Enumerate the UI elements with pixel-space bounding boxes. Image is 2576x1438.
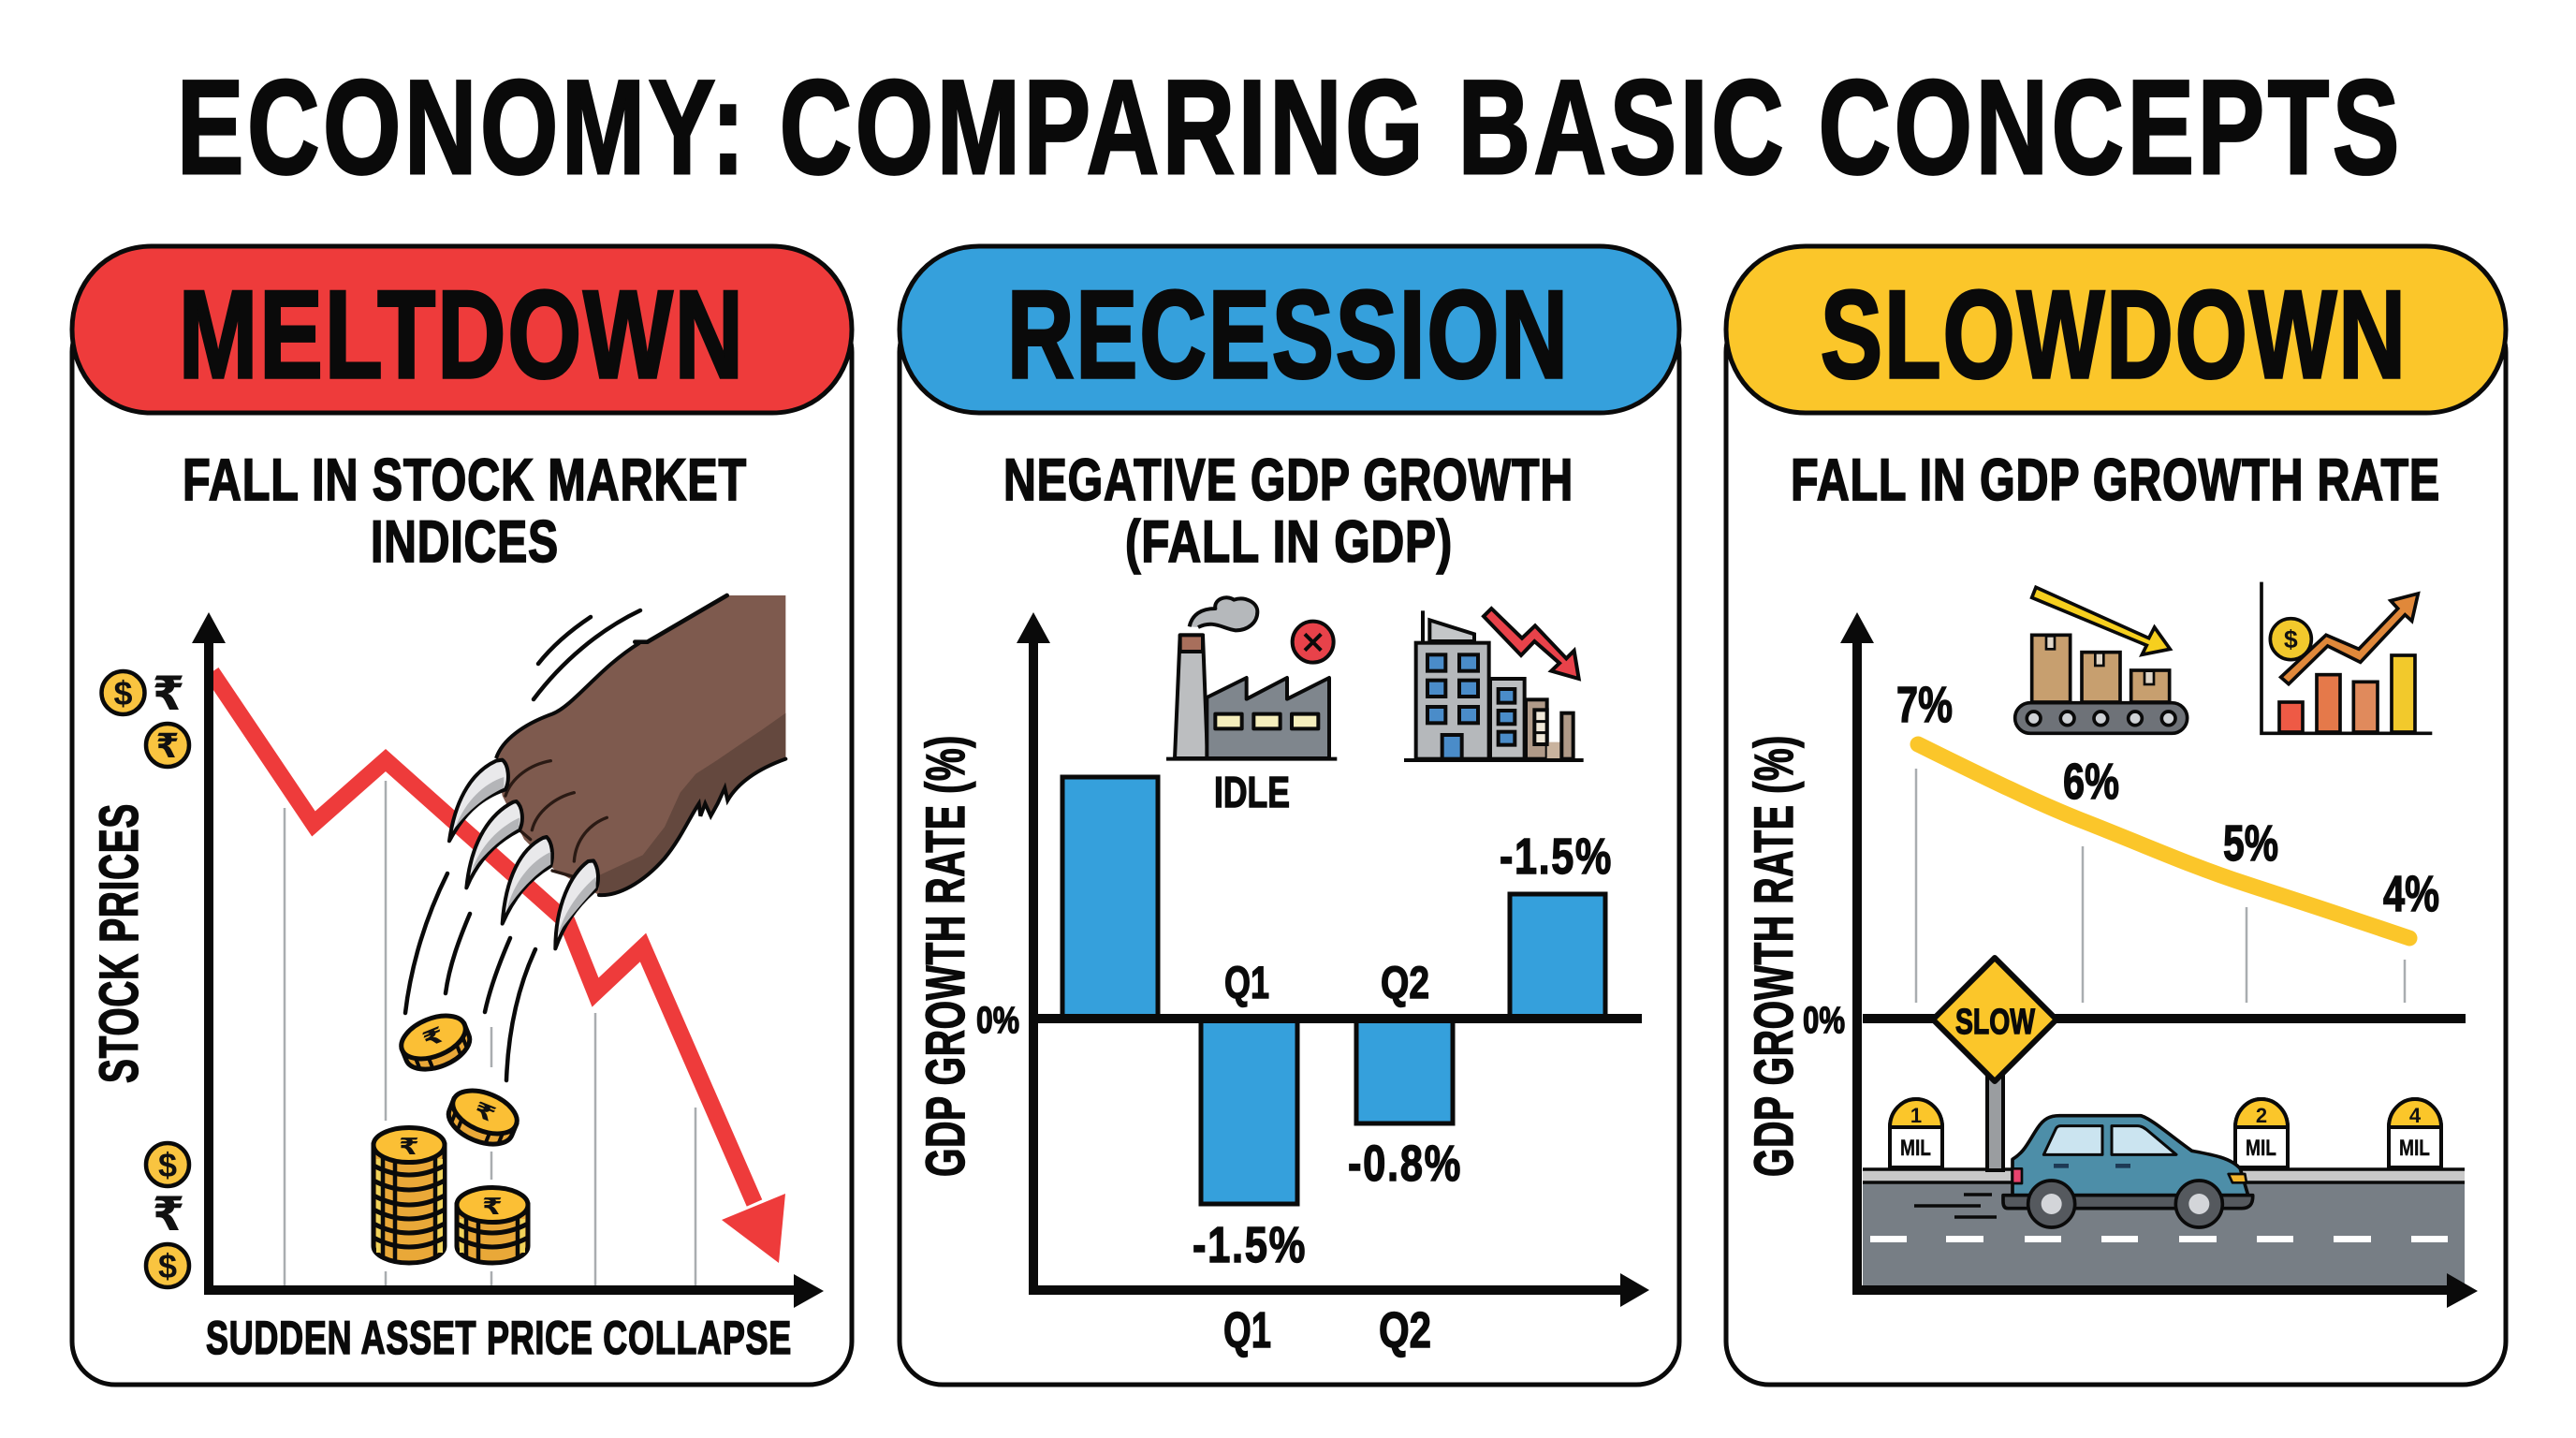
milestone 1: 1 [1910,1104,1922,1127]
sign: slow [1933,958,2056,1170]
label: idle: IDLE [1214,768,1290,816]
growth slowdown chart: 4% [2383,866,2439,922]
growth slowdown chart: 0% [1803,1000,1845,1041]
coins: high prices: ₹ [153,668,184,720]
header: slowdown [1726,246,2506,413]
motion lines [405,610,640,1080]
road [1863,1169,2465,1287]
icon: tall coin stack [373,1127,445,1263]
icon: falling rupee coin 2 [443,1082,523,1152]
axis label: gdp growth rate: GDP GROWTH RATE (%) [1744,735,1805,1177]
stock price chart [192,612,824,1308]
icon: tall coin stack: ₹ [399,1133,419,1159]
gdp bar chart: -1.5% [1193,1217,1307,1273]
icon: idle factory [1166,597,1337,759]
milestone 4: 4 [2409,1104,2422,1127]
coins: low prices [146,1143,189,1287]
coins: high prices [101,668,189,767]
icon: bear paw [449,595,785,948]
axis label: stock prices: STOCK PRICES [89,803,150,1083]
x-axis caption: SUDDEN ASSET PRICE COLLAPSE [206,1312,792,1364]
growth slowdown chart: 6% [2063,754,2119,810]
panel: meltdown [72,246,852,1385]
gdp bar chart: -0.8% [1348,1136,1462,1192]
milestone 2: MIL [2246,1136,2276,1161]
subtitle: meltdown: FALL IN STOCK MARKET [183,448,747,513]
milestone 4: MIL [2399,1136,2430,1161]
subtitle: meltdown [183,448,747,575]
bars [1062,777,1605,1204]
yellow curve [1918,744,2409,938]
gdp bar chart [976,612,1649,1358]
milestone 4 [2389,1099,2441,1167]
milestone 1 [1890,1099,1942,1167]
coins: low prices: $ [158,1247,177,1285]
milestone 1: MIL [1900,1136,1931,1161]
icon: short coin stack: ₹ [482,1193,503,1219]
icon: falling rupee coin 1: ₹ [418,1021,447,1052]
subtitle: recession: NEGATIVE GDP GROWTH [1003,448,1573,513]
coins: high prices: $ [113,674,133,712]
gdp bar chart: Q2 [1379,1302,1431,1358]
coins: low prices: $ [158,1146,177,1184]
gdp bar chart: Q1 [1224,959,1269,1008]
header: meltdown: MELTDOWN [179,266,745,404]
milestone 2: 2 [2256,1104,2267,1127]
coins: low prices: ₹ [153,1188,184,1240]
gdp bar chart: Q2 [1381,959,1429,1008]
growth slowdown chart: 5% [2223,815,2278,872]
header: recession: RECESSION [1007,266,1570,404]
sign: slow: SLOW [1955,1003,2035,1042]
milestone 2 [2235,1099,2288,1167]
header: recession [900,246,1679,413]
icon: car [1914,1116,2253,1227]
axis label: gdp growth rate: GDP GROWTH RATE (%) [915,735,976,1177]
header: meltdown [72,246,852,413]
panel: recession [900,246,1679,1385]
growth slowdown chart: 7% [1896,677,1953,733]
subtitle: meltdown: INDICES [371,509,559,575]
gdp bar chart: Q1 [1223,1302,1271,1358]
icon: short coin stack [457,1187,528,1263]
icon: rising chart with coin [2261,582,2432,733]
icon: buildings with falling arrow [1404,609,1584,760]
subtitle: recession [1003,448,1573,575]
red falling line [212,672,785,1263]
icon: falling rupee coin 2: ₹ [471,1096,500,1127]
gdp bar chart: -1.5% [1500,829,1613,885]
icon: conveyor with falling output [2015,587,2188,733]
icon: rising chart with coin: $ [2284,625,2298,653]
panel: slowdown [1726,246,2506,1385]
icon: falling rupee coin 1 [395,1007,476,1078]
growth slowdown chart [1803,612,2478,1308]
subtitle: recession: (FALL IN GDP) [1125,509,1453,575]
gdp bar chart: 0% [976,1000,1019,1041]
coins: high prices: ₹ [155,726,180,765]
